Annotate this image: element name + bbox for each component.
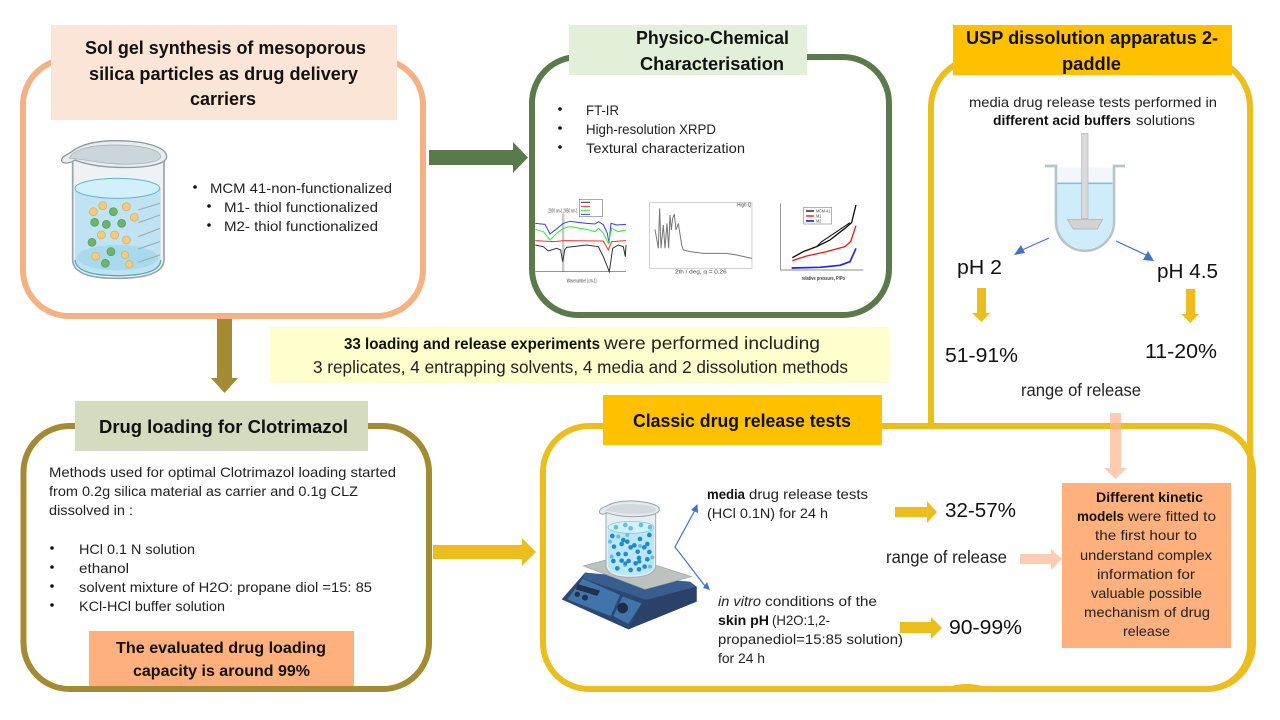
- value: 32-57%: 32-57%: [945, 500, 1016, 522]
- list: silica materials: MCM 41-non-functionalized: [210, 180, 392, 196]
- callout: kinetic models: Different kinetic: [1096, 489, 1203, 505]
- list: silica materials: M2- thiol functionalized: [224, 218, 378, 234]
- list: solvents: solvent mixture of H2O: propane diol =15: 85: [79, 579, 372, 595]
- chart: FT-IR spectra: [535, 199, 626, 285]
- heading: sol gel synthesis: [51, 25, 397, 120]
- arrow: media test to release: [895, 501, 937, 523]
- heading: USP dissolution apparatus: paddle: [1062, 54, 1121, 74]
- arrow: synthesis to drug loading: [211, 319, 238, 393]
- list: characterisation methods: Textural characterization: [586, 140, 745, 156]
- heading: drug loading for Clotrimazol: [75, 401, 368, 451]
- arrow: range of release to kinetic models: [1020, 549, 1062, 570]
- arrow: vessel to pH 2: [1014, 238, 1049, 255]
- text: in vitro skin pH test: propanediol=15:85 solution): [718, 631, 903, 647]
- text: media drug release description: media drug release tests performed in: [969, 94, 1217, 110]
- heading: sol gel synthesis: carriers: [190, 89, 256, 109]
- panel: USP dissolution apparatus: [931, 25, 1250, 470]
- text: media drug release description: different acid buffers: [993, 112, 1131, 128]
- callout: drug loading capacity: capacity is around 99%: [133, 663, 310, 680]
- value: 51-91%: 51-91%: [945, 345, 1018, 367]
- icon: beaker with particles: [62, 141, 167, 278]
- chart: nitrogen sorption isotherms: M1: [816, 214, 821, 220]
- arrow: vessel to pH 4.5: [1116, 241, 1154, 261]
- heading: classic drug release tests: [603, 395, 882, 445]
- heading: physico-chemical characterisation: [569, 25, 807, 75]
- heading: sol gel synthesis: Sol gel synthesis of mesoporous: [85, 38, 366, 58]
- arrow: synthesis to characterisation: [429, 142, 528, 173]
- panel: physico-chemical characterisation: [532, 25, 889, 315]
- chart: FT-IR spectra: Wavenumber (cm-1): [567, 279, 597, 285]
- list: solvents: [50, 541, 372, 614]
- heading: drug loading for Clotrimazol: Drug loading for Clotrimazol: [99, 417, 348, 437]
- panel: classic drug release tests: [543, 395, 1253, 689]
- list: characterisation methods: [558, 102, 745, 156]
- panel frame: USP apparatus: [931, 58, 1250, 470]
- chart: nitrogen sorption isotherms: M2: [816, 219, 821, 225]
- heading: physico-chemical characterisation: Characterisation: [640, 54, 784, 74]
- value: 11-20%: 11-20%: [1145, 341, 1217, 363]
- text: media release test: (HCl 0.1N) for 24 h: [707, 505, 828, 521]
- arrow: pH 2 to release: [972, 288, 990, 322]
- arrow: branching to test conditions: [675, 504, 710, 590]
- chart: XRPD pattern: High Q: [737, 203, 751, 209]
- callout: kinetic models: understand complex: [1080, 547, 1212, 563]
- list: silica materials: M1- thiol functionalized: [224, 199, 378, 215]
- heading: USP dissolution apparatus: USP dissolution apparatus 2-: [966, 28, 1218, 48]
- chart: FT-IR spectra: 2920 cm-1 2850 cm-1: [548, 208, 578, 214]
- arrow: drug loading to classic release: [433, 538, 536, 566]
- heading: sol gel synthesis: silica particles as drug delivery: [89, 64, 358, 84]
- callout: kinetic models: [1062, 483, 1231, 648]
- label: range of release: range of release: [886, 547, 1007, 567]
- callout: kinetic models: models: [1077, 508, 1124, 524]
- callout: 33 loading and release experiments: [270, 327, 889, 383]
- arrow: in vitro test to release: [900, 617, 942, 639]
- text: loading methods: from 0.2g silica material as carrier and 0.1g CLZ: [49, 483, 358, 499]
- list: characterisation methods: High-resolution XRPD: [586, 121, 716, 137]
- arrow: pH 4.5 to release: [1181, 289, 1199, 323]
- chart: nitrogen sorption isotherms: [781, 203, 863, 282]
- icon: hotplate stirrer with beaker: [562, 501, 697, 629]
- callout: kinetic models: release: [1123, 623, 1170, 639]
- callout: kinetic models: the first hour to: [1095, 527, 1197, 543]
- chart: XRPD pattern: 2th / deg, q = 0.26: [675, 269, 727, 275]
- callout: kinetic models: were fitted to: [1127, 508, 1216, 524]
- heading: USP dissolution apparatus: [953, 25, 1232, 75]
- text: in vitro skin pH test: skin pH: [718, 612, 769, 628]
- panel: sol gel synthesis: [23, 25, 423, 316]
- list: silica materials: [193, 180, 392, 234]
- label: range of release: range of release: [1021, 380, 1141, 400]
- panel: drug loading: [24, 401, 429, 689]
- panel frame: synthesis: [23, 59, 423, 316]
- chart: nitrogen sorption isotherms: relative pressure, P/Po: [802, 276, 845, 282]
- callout: kinetic models: information for: [1097, 566, 1195, 582]
- label: pH 2: pH 2: [957, 257, 1002, 279]
- callout: 33 loading and release experiments: were performed including: [603, 333, 820, 353]
- callout: 33 loading and release experiments: 33 loading and release experiments: [344, 336, 600, 353]
- list: characterisation methods: FT-IR: [586, 102, 619, 118]
- list: solvents: HCl 0.1 N solution: [79, 541, 195, 557]
- heading: physico-chemical characterisation: Physico-Chemical: [636, 28, 789, 48]
- text: media drug release description: [969, 94, 1217, 128]
- icon: paddle vessel: [1045, 133, 1125, 251]
- list: solvents: KCl-HCl buffer solution: [79, 598, 225, 614]
- text: in vitro skin pH test: in vitro: [718, 593, 761, 609]
- callout: drug loading capacity: The evaluated drug loading: [116, 640, 326, 657]
- label: pH 4.5: pH 4.5: [1157, 261, 1218, 283]
- text: loading methods: [49, 464, 396, 518]
- chart: XRPD pattern: [649, 203, 752, 275]
- panel frame: classic release: [543, 400, 1253, 689]
- callout: 33 loading and release experiments: 3 replicates, 4 entrapping solvents, 4 media and 2 dissolution methods: [313, 357, 848, 377]
- callout: drug loading capacity: [89, 631, 354, 686]
- callout: kinetic models: valuable possible: [1091, 585, 1202, 601]
- value: 90-99%: 90-99%: [949, 617, 1022, 639]
- panel frame: characterisation: [532, 57, 889, 315]
- list: solvents: ethanol: [79, 560, 129, 576]
- text: in vitro skin pH test: conditions of the: [765, 593, 877, 609]
- text: media release test: [707, 486, 868, 521]
- text: media release test: media: [707, 486, 745, 502]
- text: in vitro skin pH test: [718, 593, 903, 666]
- text: in vitro skin pH test: for 24 h: [718, 650, 765, 666]
- panel frame: drug loading: [24, 426, 429, 689]
- text: in vitro skin pH test: (H2O:1,2-: [772, 612, 830, 628]
- heading: classic drug release tests: Classic drug release tests: [633, 411, 851, 431]
- text: loading methods: Methods used for optimal Clotrimazol loading started: [49, 464, 396, 480]
- text: media drug release description: solutions: [1136, 112, 1195, 128]
- text: media release test: drug release tests: [749, 486, 868, 502]
- text: loading methods: dissolved in :: [49, 502, 133, 518]
- chart: nitrogen sorption isotherms: MCM-41: [816, 209, 830, 215]
- callout: kinetic models: mechanism of drug: [1084, 604, 1210, 620]
- arrow: USP release to kinetic models: [1104, 413, 1127, 479]
